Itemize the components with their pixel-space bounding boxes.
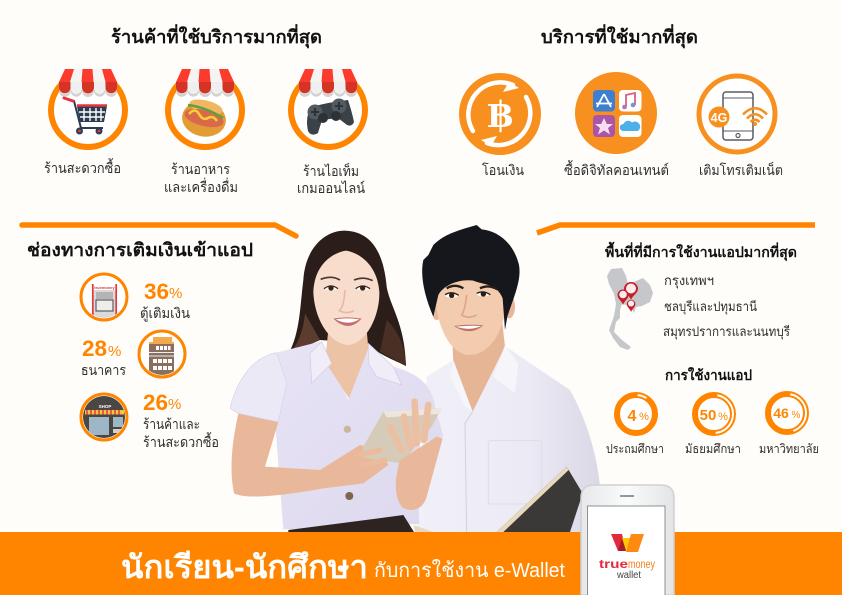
panel: most used stores xyxy=(44,24,365,196)
map: Thailand with pins xyxy=(607,268,653,350)
logo mark xyxy=(611,534,644,552)
left bracket line xyxy=(22,225,296,236)
stat: shops 26 percent: 26 xyxy=(143,390,168,415)
label: top-up phone and internet: เติมโทรเติมเน็ต xyxy=(699,161,783,178)
label: online game item stores xyxy=(297,162,365,196)
logo text true money: money xyxy=(628,559,655,571)
heading: top usage areas: พื้นที่ที่มีการใช้งานแอปมากที่สุด xyxy=(605,241,797,261)
logo text wallet: wallet xyxy=(616,570,641,581)
label: university: มหาวิทยาลัย xyxy=(759,442,819,456)
panel: top app usage areas xyxy=(605,241,797,350)
banner title: นักเรียน-นักศึกษา xyxy=(121,549,368,585)
label: buy digital content: ซื้อดิจิทัลคอนเทนต์ xyxy=(564,160,669,178)
phone with truemoney wallet logo xyxy=(581,485,674,595)
stat: shops 26 percent xyxy=(143,390,181,415)
icon: bank building xyxy=(139,331,185,378)
stat: kiosk 36 percent: 36 xyxy=(144,279,169,304)
panel: app usage by education xyxy=(606,366,819,456)
stat: bank 28 percent xyxy=(82,336,121,361)
label: shops and convenience stores: ร้านค้าและ xyxy=(143,416,200,432)
panel: top-up channels xyxy=(27,240,253,450)
female student xyxy=(230,231,443,532)
label: shops and convenience stores xyxy=(143,416,219,450)
donut: secondary 50 percent: % xyxy=(718,411,728,423)
label: online game item stores: เกมออนไลน์ xyxy=(297,180,365,196)
male student xyxy=(413,225,600,532)
label: food and drink stores: ร้านอาหาร xyxy=(171,161,230,177)
heading: most used services: บริการที่ใช้มากที่สุด xyxy=(541,24,698,49)
right bracket line xyxy=(537,225,815,233)
donut: university 46 percent: % xyxy=(792,410,801,421)
stat: kiosk 36 percent xyxy=(144,279,182,304)
icon: game controller xyxy=(291,69,365,147)
donut: university 46 percent: 46 xyxy=(773,405,789,421)
stat: shops 26 percent: % xyxy=(168,396,181,413)
panel: most used services xyxy=(459,24,783,178)
donut: secondary 50 percent: 50 xyxy=(700,407,716,424)
icon: hot dog xyxy=(168,69,242,147)
photo: two students xyxy=(230,225,600,532)
label: primary school: ประถมศึกษา xyxy=(606,442,664,456)
donut: university 46 percent xyxy=(765,391,809,435)
label: shops and convenience stores: ร้านสะดวกซื้อ xyxy=(143,432,219,450)
heading: app usage: การใช้งานแอป xyxy=(665,366,752,383)
logo text true money: true xyxy=(599,559,628,571)
label: bank: ธนาคาร xyxy=(81,362,126,378)
stat: bank 28 percent: % xyxy=(108,343,121,360)
icon: money transfer baht: ฿ xyxy=(487,94,513,136)
label: Bangkok: กรุงเทพฯ xyxy=(664,273,714,289)
banner subtitle: กับการใช้งาน e-Wallet xyxy=(374,559,565,582)
icon: money transfer baht xyxy=(459,73,541,155)
icon: shopping cart store xyxy=(51,69,125,147)
donut: primary 4 percent: 4 xyxy=(628,408,637,425)
label: secondary school: มัธยมศึกษา xyxy=(685,442,741,456)
heading: most used stores: ร้านค้าที่ใช้บริการมากที่สุด xyxy=(111,24,322,49)
label: money transfer: โอนเงิน xyxy=(482,162,524,178)
label: online game item stores: ร้านไอเท็ม xyxy=(303,162,359,179)
stat: kiosk 36 percent: % xyxy=(169,285,182,302)
bottom banner xyxy=(0,532,842,595)
label: Samut Prakan and Nonthaburi: สมุทรปราการและนนทบุรี xyxy=(663,324,790,340)
icon: kiosk: truemoney xyxy=(94,285,115,290)
donut: primary 4 percent: % xyxy=(639,411,649,423)
icon: digital content apps xyxy=(575,72,657,154)
icon: shop: SHOP xyxy=(99,404,111,409)
donut: secondary 50 percent xyxy=(692,392,736,436)
label: Chonburi and Pathum Thani: ชลบุรีและปทุมธานี xyxy=(664,299,757,315)
icon: mobile top-up and internet xyxy=(699,76,775,152)
donut: primary 4 percent xyxy=(615,393,657,435)
icon: shop xyxy=(81,394,127,440)
label: food and drink stores: และเครื่องดื่ม xyxy=(164,178,238,195)
label: kiosk: ตู้เติมเงิน xyxy=(140,305,190,322)
icon: kiosk xyxy=(81,274,127,320)
label: convenience store: ร้านสะดวกซื้อ xyxy=(44,158,121,176)
heading: top-up channels: ช่องทางการเติมเงินเข้าแอป xyxy=(27,240,253,260)
stat: bank 28 percent: 28 xyxy=(82,336,107,361)
label: food and drink stores xyxy=(164,161,238,195)
logo text true money xyxy=(599,559,655,571)
icon: mobile top-up and internet: 4G xyxy=(711,111,727,125)
